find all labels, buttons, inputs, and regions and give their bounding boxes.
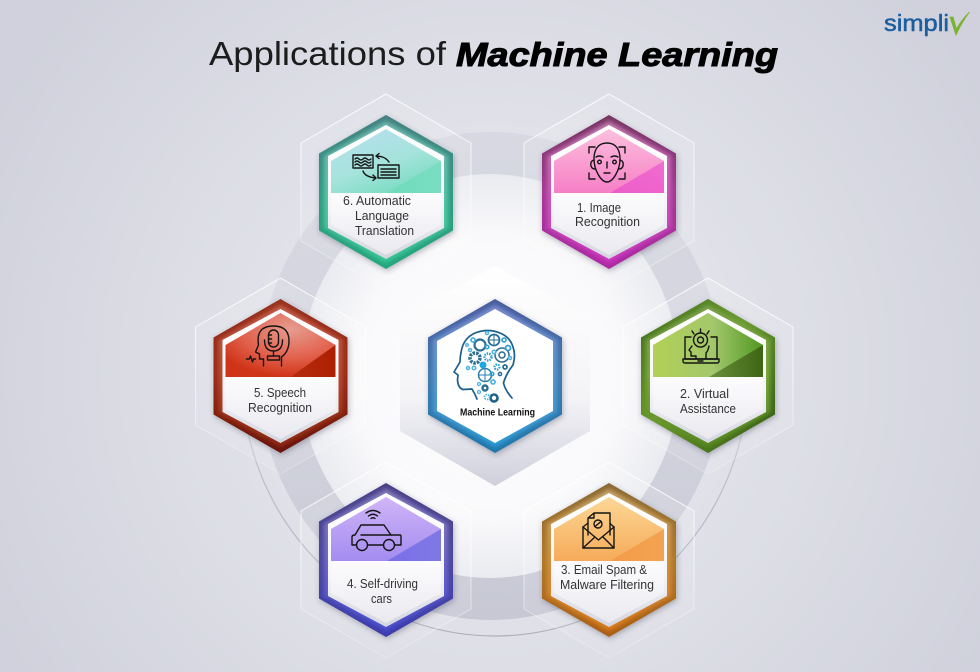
label text: 5. Speech bbox=[254, 386, 306, 400]
icon: head with gears bbox=[454, 330, 514, 402]
label: Machine Learning: Machine Learning bbox=[460, 408, 535, 418]
label text: Language bbox=[355, 209, 409, 223]
panel: 4. Self-driving cars bbox=[301, 462, 471, 658]
panel: 3. Email Spam & Malware Filtering bbox=[524, 462, 694, 658]
label text bbox=[680, 387, 736, 416]
icon: face scan bbox=[589, 143, 625, 182]
icon: translation cards bbox=[353, 154, 399, 180]
panel: 1. Image Recognition bbox=[524, 94, 694, 290]
label text bbox=[560, 563, 654, 592]
label text: Assistance bbox=[680, 402, 736, 416]
panel: 5. Speech Recognition bbox=[196, 278, 366, 474]
label text bbox=[575, 201, 640, 229]
icon: connected car bbox=[352, 510, 401, 550]
label text: 6. Automatic bbox=[343, 194, 411, 208]
label text: cars bbox=[371, 592, 392, 606]
title bbox=[209, 35, 778, 73]
title: Applications of bbox=[209, 35, 447, 72]
title: Machine Learning bbox=[456, 36, 778, 73]
label text: Recognition bbox=[248, 401, 312, 415]
icon: speaking head with microphone bbox=[246, 326, 289, 366]
logo: simpliv bbox=[884, 10, 970, 36]
logo: simpliv: simpli bbox=[884, 10, 949, 36]
icon: envelope with blocked letter bbox=[583, 513, 614, 548]
panel: centre hexagon Machine Learning bbox=[400, 266, 590, 486]
panel: 6. Automatic Language Translation bbox=[301, 94, 471, 290]
label text: Translation bbox=[355, 224, 414, 238]
concentric ring backdrop bbox=[242, 116, 748, 636]
label text: 1. Image bbox=[577, 201, 621, 215]
label text: Malware Filtering bbox=[560, 578, 654, 592]
label text: Recognition bbox=[575, 215, 640, 229]
label text: 3. Email Spam & bbox=[561, 563, 648, 577]
label text bbox=[248, 386, 312, 415]
icon: laptop with gear head bbox=[683, 329, 719, 363]
label text: 2. Virtual bbox=[680, 387, 729, 401]
panel: 2. Virtual Assistance bbox=[623, 278, 793, 474]
label text bbox=[347, 577, 418, 606]
label text bbox=[343, 194, 414, 238]
label text: 4. Self-driving bbox=[347, 577, 418, 591]
